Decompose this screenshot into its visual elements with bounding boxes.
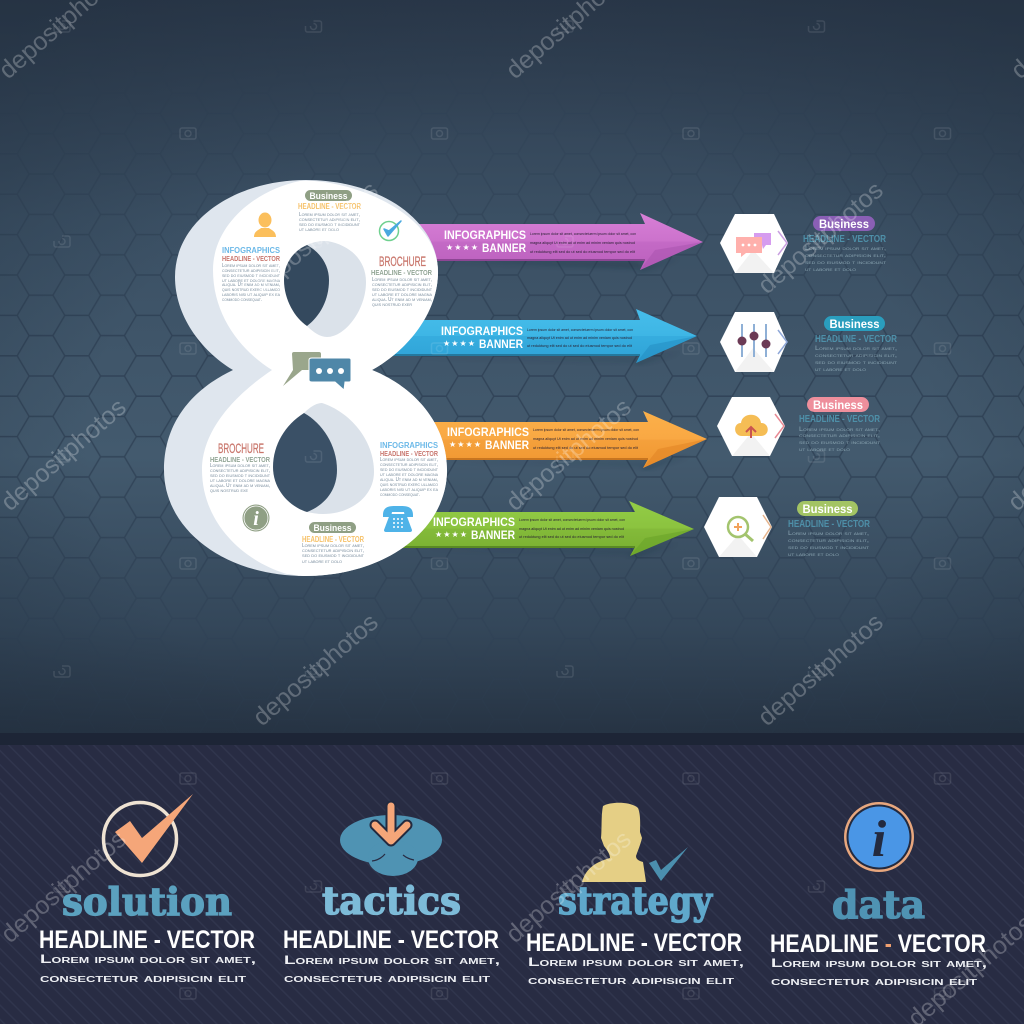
side text: teal business: Lorem ipsum dolor sit amet, bbox=[815, 346, 897, 352]
block: upper right brochure: BROCHURE bbox=[379, 253, 426, 269]
footer column: solution: HEADLINE - VECTOR bbox=[39, 926, 255, 954]
watermark text: depositphotos bbox=[248, 176, 384, 300]
footer column: tactics: consectetur adipisicin elit bbox=[284, 971, 490, 985]
background: hexagon wall bbox=[0, 0, 1024, 735]
number 8 ribbon shape bbox=[164, 180, 447, 576]
side text: green business: Lorem ipsum dolor sit amet, bbox=[788, 531, 869, 537]
block: upper left infographics: commodo consequat. bbox=[222, 297, 262, 303]
block: upper left infographics: sed do eiusmod t incididunt bbox=[222, 273, 280, 279]
footer icon: data info circle bbox=[844, 802, 914, 872]
banner text: orange: magna aliquyt Ut enim ad ut enim ad minim veniam quis nostrud bbox=[533, 437, 638, 441]
hexagon icon: chat bubbles bbox=[720, 214, 788, 273]
hexagon icon: sliders bbox=[720, 312, 787, 372]
side text: teal business: HEADLINE - VECTOR bbox=[815, 334, 898, 345]
block: upper right brochure: quis nostrud exer bbox=[372, 302, 412, 308]
banner text: pink: ★★★★ bbox=[446, 243, 478, 252]
block: lower right infographics: HEADLINE - VECTOR bbox=[380, 449, 438, 458]
block: bottom business: consectetur adipisicin elit, bbox=[302, 548, 364, 554]
side text: green business: consectetur adipisicin elit, bbox=[788, 538, 869, 544]
block: upper right brochure: ut labore et dolore magna bbox=[372, 292, 432, 298]
footer column: data: HEADLINE - VECTOR bbox=[770, 930, 986, 958]
footer icon: strategy person with check bbox=[582, 803, 688, 882]
banner text: green bbox=[433, 517, 625, 542]
block: top business: consectetur adipisicin elit, bbox=[299, 217, 360, 223]
side text: purple business bbox=[803, 216, 887, 273]
watermark text: depositphotos bbox=[501, 393, 637, 517]
banner text: orange: Lorem ipsum dolor sit amet, consectetuerm ipsum dolor sit amet, con bbox=[533, 428, 639, 432]
banner text: blue: ★★★★ bbox=[443, 339, 475, 348]
banner text: pink: BANNER bbox=[482, 243, 527, 255]
side text: purple business: Business bbox=[819, 217, 869, 231]
side text: pink business: Business bbox=[813, 398, 863, 412]
side text: teal business: Business bbox=[830, 317, 880, 331]
watermark text: depositphotos bbox=[753, 608, 889, 732]
side text: teal business: consectetur adipisicin elit, bbox=[815, 353, 897, 359]
banner text: green: BANNER bbox=[471, 530, 516, 542]
footer column: tactics: Lorem ipsum dolor sit amet, bbox=[284, 953, 500, 967]
icon: person bbox=[254, 212, 276, 237]
side text: pink business: sed do eiusmod t incididunt bbox=[799, 440, 881, 446]
block: bottom business: HEADLINE - VECTOR bbox=[302, 535, 364, 544]
footer column: strategy: Lorem ipsum dolor sit amet, bbox=[528, 955, 744, 969]
footer icon: tactics brain with arrow bbox=[340, 806, 442, 876]
banner text: pink bbox=[444, 230, 636, 255]
arrow: green bbox=[400, 501, 694, 558]
block: lower left brochure: aliqua. Ut enim ad m veniam, bbox=[210, 483, 270, 489]
side text: purple business: sed do eiusmod t incididunt bbox=[805, 260, 887, 266]
block: top business: HEADLINE - VECTOR bbox=[298, 202, 361, 211]
arrow: pink bbox=[410, 213, 703, 272]
block: bottom business: Lorem ipsum dolor sit amet, bbox=[302, 543, 364, 549]
footer column: tactics: HEADLINE - VECTOR bbox=[283, 926, 499, 954]
icon: info badge: i bbox=[253, 508, 259, 530]
block: lower right infographics: ut labore et dolore magna bbox=[380, 472, 438, 478]
block: upper right brochure: consectetur adipisicin elit, bbox=[372, 282, 432, 288]
hexagon icon: magnifier bbox=[704, 497, 772, 557]
block: lower right infographics: aliqua. Ut enim ad m veniam, bbox=[380, 477, 438, 483]
block: top business: Business bbox=[310, 191, 348, 202]
banner text: orange: INFOGRAPHICS bbox=[447, 427, 529, 439]
block: bottom business bbox=[302, 522, 365, 565]
banner text: blue bbox=[441, 326, 633, 351]
block: bottom business: ut labore et dolo bbox=[302, 559, 342, 565]
block: lower right infographics bbox=[380, 441, 439, 498]
arrow: blue bbox=[390, 309, 697, 365]
banner text: green: magna aliquyt Ut enim ad ut enim ad minim veniam quis nostrud bbox=[519, 527, 624, 531]
footer column: strategy: HEADLINE - VECTOR bbox=[526, 929, 742, 957]
side text: purple business: consectetur adipisicin elit, bbox=[805, 253, 886, 259]
block: lower left brochure bbox=[210, 440, 271, 494]
block: top business: ut labore et dolo bbox=[299, 227, 339, 233]
side text: green business: HEADLINE - VECTOR bbox=[788, 519, 871, 530]
block: upper left infographics: consectetur adipisicin elit, bbox=[222, 268, 280, 274]
side text: green business bbox=[788, 501, 871, 558]
watermark text: depositphotos bbox=[501, 825, 637, 949]
banner text: orange bbox=[447, 427, 639, 452]
side text: pink business: HEADLINE - VECTOR bbox=[799, 414, 881, 425]
icon: telephone bbox=[383, 506, 413, 532]
block: lower right infographics: laboris nisi ut aliquip ex ea bbox=[380, 487, 438, 493]
footer icon: solution check bbox=[104, 794, 193, 876]
block: upper right brochure: sed do eiusmod t incididunt bbox=[372, 287, 433, 293]
side text: purple business: ut labore et dolo bbox=[805, 267, 856, 273]
side text: pink business: Lorem ipsum dolor sit amet, bbox=[799, 427, 880, 433]
block: upper left infographics: aliqua. Ut enim ad m veniam, bbox=[222, 282, 280, 288]
side text: pink business: ut labore et dolo bbox=[799, 447, 850, 453]
block: upper right brochure bbox=[371, 253, 433, 308]
side text: pink business bbox=[799, 397, 881, 453]
block: lower left brochure: BROCHURE bbox=[218, 440, 264, 456]
block: upper left infographics: Lorem ipsum dolor sit amet, bbox=[222, 263, 280, 269]
block: lower right infographics: Lorem ipsum dolor sit amet, bbox=[380, 457, 438, 463]
footer column: strategy bbox=[526, 878, 744, 987]
block: lower right infographics: sed do eiusmod t incididunt bbox=[380, 467, 438, 473]
block: upper left infographics: INFOGRAPHICS bbox=[222, 246, 281, 255]
arrow: orange bbox=[420, 411, 707, 470]
icon: info badge bbox=[242, 504, 270, 532]
banner text: green: ut reduktung elit sed do ut sed do eiusmod tempor sed do elit bbox=[519, 535, 624, 539]
watermark text: depositphotos bbox=[753, 176, 889, 300]
banner text: blue: Lorem ipsum dolor sit amet, consectetuerm ipsum dolor sit amet, con bbox=[527, 328, 633, 332]
footer column: data bbox=[770, 882, 987, 988]
block: lower left brochure: Lorem ipsum dolor sit amet, bbox=[210, 463, 270, 469]
icon: check circle bbox=[380, 221, 401, 240]
block: lower left brochure: sed do eiusmod t incididunt bbox=[210, 473, 271, 479]
footer column: strategy: consectetur adipisicin elit bbox=[528, 973, 734, 987]
banner text: pink: INFOGRAPHICS bbox=[444, 230, 526, 242]
block: lower right infographics: consectetur adipisicin elit, bbox=[380, 462, 438, 468]
banner text: green: INFOGRAPHICS bbox=[433, 517, 515, 529]
banner text: orange: BANNER bbox=[485, 440, 530, 452]
block: bottom business: Business bbox=[314, 523, 352, 534]
block: lower right infographics: quis nostrud exerc ullamco bbox=[380, 482, 438, 488]
banner text: orange: ut reduktung elit sed do ut sed do eiusmod tempor sed do elit bbox=[533, 446, 638, 450]
block: top business: Lorem ipsum dolor sit amet, bbox=[299, 212, 360, 218]
block: upper left infographics bbox=[222, 246, 281, 303]
block: upper left infographics: laboris nisi ut aliquip ex ea bbox=[222, 292, 280, 298]
footer column: data: Lorem ipsum dolor sit amet, bbox=[771, 956, 987, 970]
block: lower right infographics: commodo consequat. bbox=[380, 492, 420, 498]
block: lower left brochure: ut labore et dolore magna bbox=[210, 478, 270, 484]
side text: pink business: consectetur adipisicin elit, bbox=[799, 433, 880, 439]
side text: green business: Business bbox=[802, 502, 853, 516]
block: top business bbox=[298, 190, 361, 233]
side text: purple business: Lorem ipsum dolor sit amet, bbox=[805, 246, 886, 252]
footer column: strategy: strategy bbox=[558, 878, 713, 923]
footer column: solution: solution bbox=[62, 879, 232, 924]
footer column: data: data bbox=[832, 882, 925, 927]
watermark text: depositphotos bbox=[248, 608, 384, 732]
block: bottom business: sed do eiusmod t incididunt bbox=[302, 553, 365, 559]
background: striped footer band bbox=[0, 733, 1024, 1024]
block: top business: sed do eiusmod t incididunt bbox=[299, 222, 361, 228]
block: upper right brochure: HEADLINE - VECTOR bbox=[371, 268, 432, 277]
banner text: green: Lorem ipsum dolor sit amet, consectetuerm ipsum dolor sit amet, con bbox=[519, 518, 625, 522]
footer icon: data info circle: i bbox=[872, 811, 887, 868]
banner text: pink: ut reduktung elit sed do ut sed do eiusmod tempor sed do elit bbox=[530, 250, 635, 254]
block: upper left infographics: quis nostrud exerc ullamco bbox=[222, 287, 280, 293]
block: upper right brochure: aliqua. Ut enim ad m veniam, bbox=[372, 297, 432, 303]
banner text: pink: magna aliquyt Ut enim ad ut enim ad minim veniam quis nostrud bbox=[530, 241, 635, 245]
side text: green business: ut labore et dolo bbox=[788, 552, 839, 558]
hexagon icon: cloud upload bbox=[717, 397, 785, 456]
banner text: green: ★★★★ bbox=[435, 530, 467, 539]
side text: teal business: sed do eiusmod t incididunt bbox=[815, 360, 898, 366]
banner text: blue: ut reduktung elit sed do ut sed do eiusmod tempor sed do elit bbox=[527, 344, 632, 348]
footer column: tactics bbox=[283, 878, 500, 985]
footer column: tactics: tactics bbox=[322, 878, 461, 923]
footer column: solution: Lorem ipsum dolor sit amet, bbox=[40, 952, 256, 966]
banner text: blue: BANNER bbox=[479, 339, 524, 351]
block: lower left brochure: consectetur adipisicin elit, bbox=[210, 468, 270, 474]
side text: teal business: ut labore et dolo bbox=[815, 367, 866, 373]
side text: green business: sed do eiusmod t incididunt bbox=[788, 545, 870, 551]
side text: purple business: HEADLINE - VECTOR bbox=[803, 234, 887, 245]
block: upper right brochure: Lorem ipsum dolor sit amet, bbox=[372, 277, 432, 283]
block: upper left infographics: HEADLINE - VECTOR bbox=[222, 254, 280, 263]
block: upper left infographics: ut labore et dolore magna bbox=[222, 278, 280, 284]
block: lower right infographics: INFOGRAPHICS bbox=[380, 441, 439, 450]
footer column: solution: consectetur adipisicin elit bbox=[40, 971, 246, 985]
footer column: solution bbox=[39, 879, 256, 985]
icon: speech bubbles bbox=[283, 352, 351, 390]
banner text: orange: ★★★★ bbox=[449, 440, 481, 449]
side text: teal business bbox=[815, 316, 898, 373]
footer column: data: consectetur adipisicin elit bbox=[771, 974, 977, 988]
block: lower left brochure: HEADLINE - VECTOR bbox=[210, 455, 270, 464]
banner text: blue: magna aliquyt Ut enim ad ut enim ad minim veniam quis nostrud bbox=[527, 336, 632, 340]
block: lower left brochure: quis nostrud exe bbox=[210, 488, 248, 494]
banner text: blue: INFOGRAPHICS bbox=[441, 326, 523, 338]
banner text: pink: Lorem ipsum dolor sit amet, consectetuerm ipsum dolor sit amet, con bbox=[530, 232, 636, 236]
